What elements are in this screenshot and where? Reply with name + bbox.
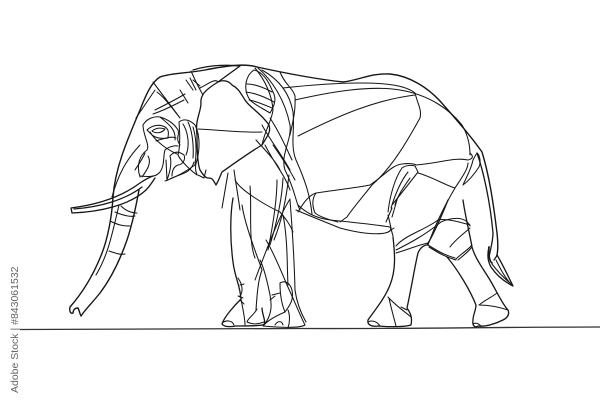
tusk — [71, 176, 155, 213]
tail — [477, 153, 513, 286]
ear — [180, 65, 270, 210]
hind left leg — [428, 200, 509, 327]
hind right leg — [368, 200, 448, 327]
front legs — [222, 175, 391, 328]
body panels — [280, 72, 480, 245]
body outline — [113, 65, 498, 255]
elephant — [70, 65, 513, 328]
trunk — [70, 190, 139, 316]
head — [112, 82, 206, 197]
hind panels — [386, 165, 470, 253]
stock credit: Adobe Stock | #843061532 — [9, 266, 21, 393]
shoulder stripes — [235, 68, 312, 258]
ground line — [20, 327, 600, 330]
